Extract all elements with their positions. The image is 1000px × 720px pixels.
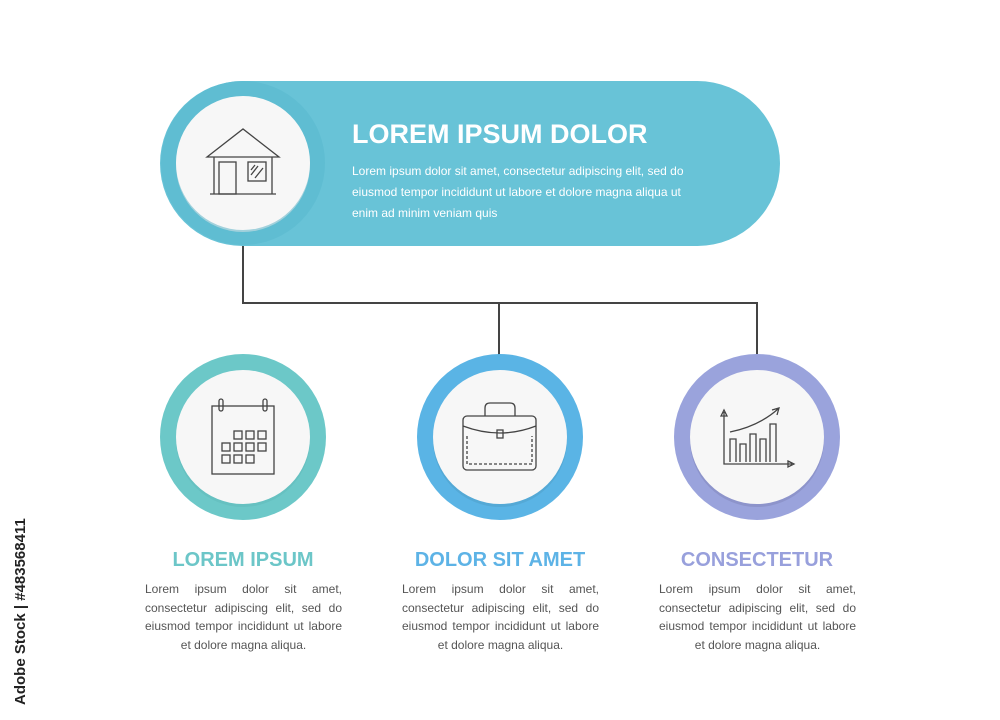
icon: calendar circle [160,354,326,520]
icon: house circle [161,81,325,245]
panel: header pill [160,81,780,246]
title: lorem ipsum: LOREM IPSUM [172,549,314,571]
header text: Lorem ipsum dolor sit amet, consectetur adipiscing elit, sed do eiusmod tempor incididunt ut labore et dolore magna aliqua ut enim ad minim veniam quis [352,164,684,220]
title: consectetur: CONSECTETUR [681,549,833,571]
side watermark text: Adobe Stock | #483568411 [12,518,29,705]
text block 2: Lorem ipsum dolor sit amet, consectetur adipiscing elit, sed do eiusmod tempor incididunt ut labore et dolore magna aliqua. [402,582,599,652]
text block 1: Lorem ipsum dolor sit amet, consectetur adipiscing elit, sed do eiusmod tempor incididunt ut labore et dolore magna aliqua. [145,582,342,652]
icon: chart circle [674,354,840,520]
title: dolor sit amet: DOLOR SIT AMET [415,549,585,571]
heading: LOREM IPSUM DOLOR [352,119,648,149]
icon: briefcase circle [417,354,583,520]
text block 3: Lorem ipsum dolor sit amet, consectetur adipiscing elit, sed do eiusmod tempor incididunt ut labore et dolore magna aliqua. [659,582,856,652]
